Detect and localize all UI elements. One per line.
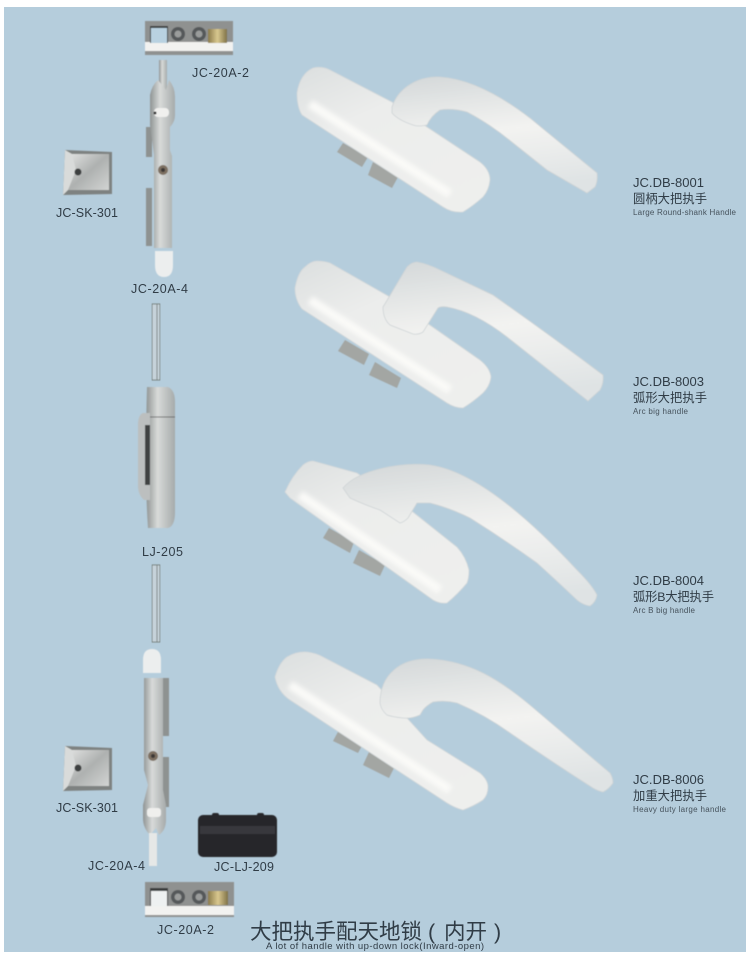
- backplate: [295, 261, 491, 408]
- handle label: JC.DB-8004: [633, 573, 714, 615]
- backplate: [297, 67, 490, 212]
- handle label: JC.DB-8003: JC.DB-8003: [633, 374, 704, 389]
- title: ): [494, 920, 501, 944]
- handle: JC.DB-8003: [295, 261, 603, 408]
- base highlight: [310, 104, 450, 194]
- handle: JC.DB-8001: [297, 67, 597, 212]
- title: (: [428, 920, 436, 944]
- lower bolt: JC-20A-4: [143, 649, 169, 866]
- handle label: JC.DB-8004: 弧形B大把执手: [633, 590, 714, 604]
- base highlight: [290, 685, 450, 790]
- handle label: JC.DB-8003: 弧形大把执手: [633, 391, 707, 405]
- handle label: JC.DB-8003: Arc big handle: [633, 407, 689, 416]
- lever: [343, 464, 597, 606]
- spindles: [337, 143, 398, 188]
- base highlight: [300, 495, 440, 590]
- handle label: JC.DB-8001: [633, 175, 737, 217]
- label: JC-20A-2 bottom: JC-20A-2: [157, 923, 214, 937]
- backplate: [285, 461, 469, 603]
- handle: JC.DB-8006: [275, 652, 613, 810]
- handle label: JC.DB-8006: JC.DB-8006: [633, 772, 704, 787]
- handle label: JC.DB-8001: 圆柄大把执手: [633, 192, 707, 206]
- strike plate: JC-SK-301 bottom: [63, 746, 112, 791]
- connecting rod lower: [152, 565, 160, 642]
- label: JC-20A-2 top: JC-20A-2: [192, 66, 249, 80]
- base highlight: [310, 300, 450, 390]
- backplate: [275, 652, 488, 810]
- handle label: JC.DB-8004: JC.DB-8004: [633, 573, 704, 588]
- lever: [380, 659, 613, 792]
- strike plate: JC-SK-301 top: [63, 150, 112, 195]
- spindles: [333, 730, 394, 778]
- label: JC-SK-301 bottom: JC-SK-301: [56, 801, 118, 815]
- handle label: JC.DB-8001: JC.DB-8001: [633, 175, 704, 190]
- black connector: JC-LJ-209: [198, 813, 277, 857]
- title: 大把执手配天地锁: [250, 920, 422, 944]
- label: JC-20A-4 upper: JC-20A-4: [131, 282, 188, 296]
- handle label: JC.DB-8006: [633, 772, 727, 814]
- connecting rod upper: [152, 304, 160, 380]
- spindles: [323, 528, 385, 576]
- label: JC-LJ-209: JC-LJ-209: [214, 860, 274, 874]
- subtitle: A lot of handle with up-down lock(Inward-open): [266, 941, 484, 952]
- label: JC-SK-301 top: JC-SK-301: [56, 206, 118, 220]
- label: LJ-205: LJ-205: [142, 545, 183, 559]
- lock: JC-20A-2 bottom: [145, 882, 234, 917]
- corner drive: LJ-205: [138, 387, 175, 528]
- upper bolt: JC-20A-4: [146, 60, 175, 277]
- lock: JC-20A-2 top: [145, 21, 233, 55]
- handle label: JC.DB-8003: [633, 374, 707, 416]
- title: 内开: [444, 920, 487, 944]
- handle label: JC.DB-8004: Arc B big handle: [633, 606, 696, 615]
- handle label: JC.DB-8001: Large Round-shank Handle: [633, 208, 737, 217]
- lever: [383, 262, 603, 401]
- lever: [392, 77, 597, 193]
- label: JC-20A-4 lower: JC-20A-4: [88, 859, 145, 873]
- handle label: JC.DB-8006: 加重大把执手: [633, 789, 707, 803]
- spindles: [338, 340, 401, 388]
- handle: JC.DB-8004: [285, 461, 597, 606]
- handle label: JC.DB-8006: Heavy duty large handle: [633, 805, 727, 814]
